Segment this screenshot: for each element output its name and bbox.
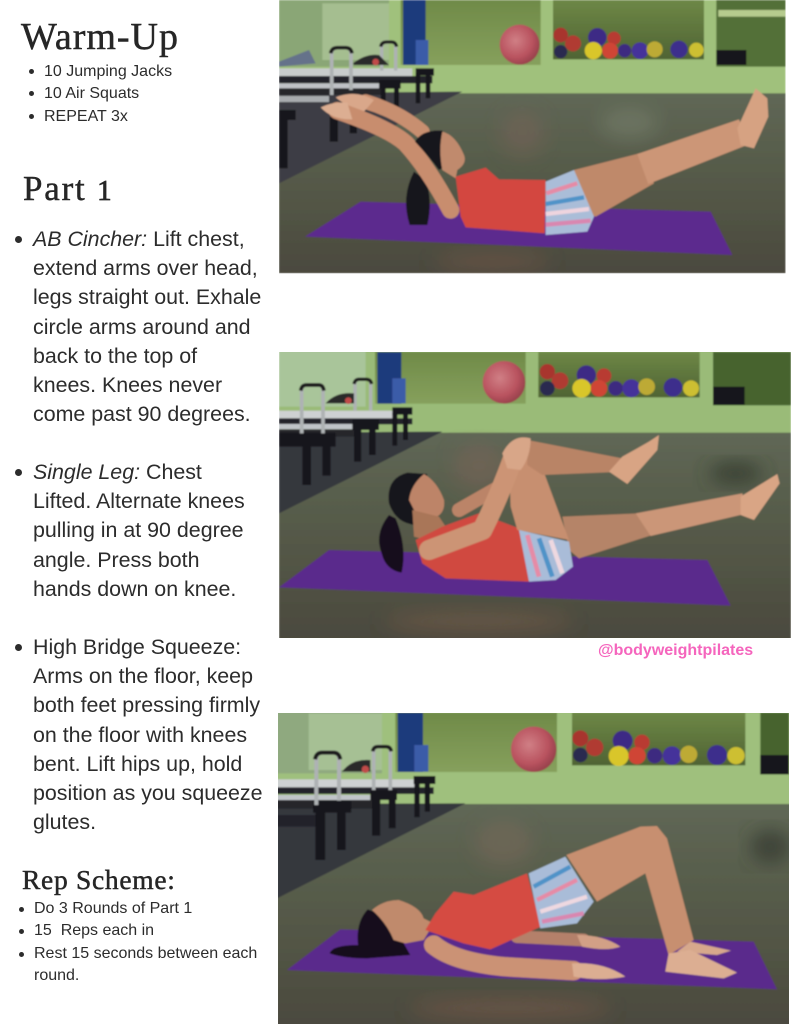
mat [287, 929, 777, 989]
list: rep scheme items: round. [34, 967, 79, 984]
text block: High Bridge Squeeze [15, 635, 263, 834]
hair [389, 473, 427, 525]
list: warm-up items: 10 Air Squats [44, 85, 139, 102]
heading: Warm-Up: Warm-Up [21, 16, 179, 58]
mat [305, 202, 732, 255]
text block: Single Leg: pulling in at 90 degree [33, 518, 244, 542]
near arm [434, 945, 574, 971]
text block: Single Leg: Single Leg: Chest [33, 460, 202, 484]
list: rep scheme items [19, 900, 257, 984]
text block: AB Cincher: back to the top of [33, 344, 197, 368]
heading: Part 1: Part 1 [23, 169, 113, 208]
photo: high bridge squeeze exercise [277, 710, 790, 1024]
head and neck [440, 132, 465, 178]
list: rep scheme items: Do 3 Rounds of Part 1 [34, 900, 192, 917]
back foot [677, 942, 731, 955]
near arm [337, 111, 451, 210]
hair [414, 130, 443, 170]
top [456, 168, 546, 233]
raised leg [566, 826, 694, 955]
heading: Rep Scheme: Rep Scheme: [22, 864, 176, 895]
text block: AB Cincher: AB Cincher: Lift chest, [33, 227, 245, 251]
photo: ab cincher exercise [279, 0, 786, 273]
head and neck [409, 474, 446, 540]
text block: High Bridge Squeeze: both feet pressing firmly [33, 693, 260, 717]
near arm [429, 460, 512, 550]
text block: AB Cincher: knees. Knees never [33, 373, 222, 397]
shorts [519, 530, 573, 582]
far arm [517, 937, 584, 940]
text block: High Bridge Squeeze: High Bridge Squeeze: [33, 635, 241, 659]
text block: AB Cincher: circle arms around and [33, 315, 251, 339]
text block: High Bridge Squeeze: on the floor with knees [33, 723, 247, 747]
text block: Single Leg: hands down on knee. [33, 577, 236, 601]
text block: Single Leg: Lifted. Alternate knees [33, 489, 245, 513]
watermark: @bodyweightpilates: @bodyweightpilates [598, 642, 753, 659]
top [425, 873, 541, 949]
list: rep scheme items: 15 Reps each in [34, 922, 154, 939]
ponytail [406, 172, 430, 225]
far arm [366, 102, 422, 132]
text block: High Bridge Squeeze: position as you squeeze [33, 781, 263, 805]
text block: High Bridge Squeeze: glutes. [33, 810, 96, 834]
list: warm-up items: 10 Jumping Jacks [44, 63, 172, 80]
head and neck [372, 900, 434, 943]
list: rep scheme items: Rest 15 seconds between each [34, 945, 257, 962]
list: warm-up items: REPEAT 3x [44, 108, 128, 125]
text block: High Bridge Squeeze: Arms on the floor, keep [33, 664, 253, 688]
text block: AB Cincher: come past 90 degrees. [33, 402, 251, 426]
mat [279, 550, 731, 606]
bent leg [509, 450, 569, 540]
top [416, 513, 529, 582]
shorts [546, 170, 594, 235]
text block: Single Leg [15, 460, 245, 601]
text block: High Bridge Squeeze: bent. Lift hips up, hold [33, 752, 242, 776]
text block: AB Cincher: extend arms over head, [33, 256, 258, 280]
shorts [529, 857, 594, 928]
photo: single leg exercise [279, 350, 791, 639]
text block: Single Leg: angle. Press both [33, 548, 199, 572]
hair [330, 909, 410, 958]
far arm [459, 483, 506, 510]
legs [574, 153, 654, 217]
text block: AB Cincher: legs straight out. Exhale [33, 285, 261, 309]
straight leg [562, 513, 652, 558]
text block: AB Cincher [15, 227, 261, 426]
list: warm-up items [29, 63, 172, 125]
